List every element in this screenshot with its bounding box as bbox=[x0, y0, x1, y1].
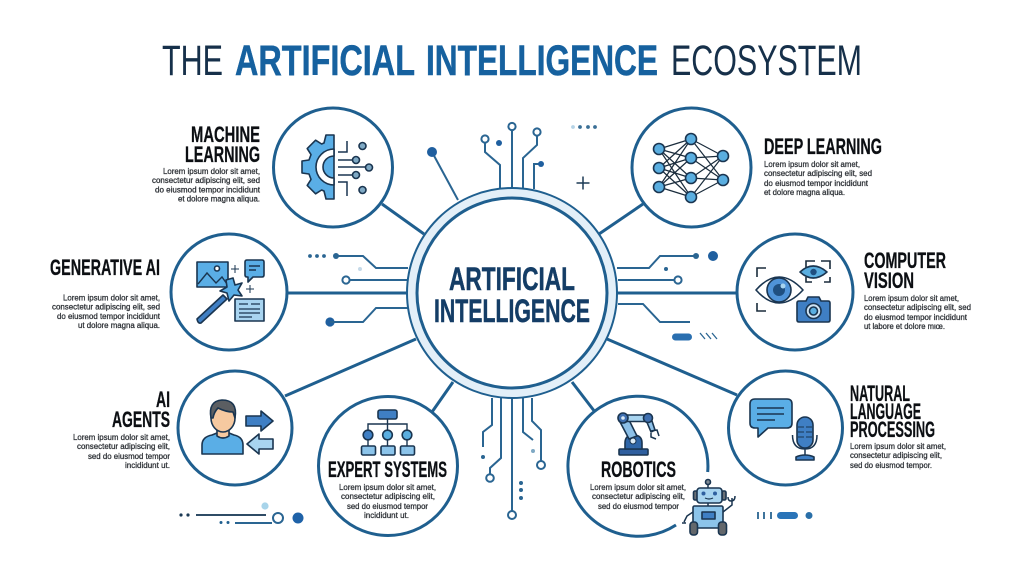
panel: machine learning bbox=[152, 108, 392, 227]
panel: deep learning bbox=[632, 108, 882, 227]
hub label bbox=[434, 261, 590, 329]
text block: do eiusmod tempor incididunt bbox=[57, 312, 161, 321]
text block bbox=[590, 483, 686, 511]
text block: et dolore magna aliqua. bbox=[764, 188, 845, 197]
heading bbox=[112, 387, 170, 432]
text block bbox=[850, 442, 946, 470]
heading: COMPUTER bbox=[864, 248, 946, 273]
text block: consectetur adipiscing elit, sed bbox=[52, 302, 160, 312]
title: ECOSYSTEM bbox=[671, 37, 862, 85]
text block: incididunt ut. bbox=[364, 511, 409, 520]
icon: eyes and camera bbox=[756, 261, 830, 322]
circuit traces top bbox=[427, 123, 597, 200]
panel: natural language processing bbox=[728, 371, 946, 485]
heading: LANGUAGE bbox=[850, 399, 921, 424]
heading: NATURAL bbox=[850, 381, 910, 406]
text block: Lorem ipsum dolor sit amet, bbox=[764, 160, 860, 169]
icon: small robot bbox=[682, 480, 735, 535]
panel: ai agents bbox=[73, 371, 292, 485]
text block: consectetur adipiscing elit, sed bbox=[152, 176, 260, 185]
text block: Lorem ipsum dolor sit amet, bbox=[850, 442, 946, 451]
heading: GENERATIVE AI bbox=[50, 255, 160, 280]
text block: sed do eiusmod tempor bbox=[88, 452, 170, 461]
text block: Lorem ipsum dolor sit amet, bbox=[590, 483, 686, 492]
icon: speech bubble and microphone bbox=[750, 399, 817, 460]
title: INTELLIGENCE bbox=[426, 37, 658, 85]
title bbox=[162, 37, 862, 85]
text block: et dolore magna aliqua. bbox=[178, 194, 260, 204]
heading: ROBOTICS bbox=[601, 457, 676, 482]
central hub: artificial intelligence bbox=[407, 188, 617, 398]
heading: VISION bbox=[864, 268, 914, 293]
text block: consectetur adipiscing elit, sed bbox=[864, 303, 971, 312]
text block: sed do eiusmod tempor bbox=[347, 502, 428, 511]
text block bbox=[764, 160, 872, 197]
text block: incididunt ut. bbox=[125, 461, 170, 470]
panel: generative ai bbox=[50, 234, 287, 350]
heading: AI bbox=[156, 387, 170, 412]
text block: consectetur adipiscing elit, bbox=[850, 451, 942, 460]
text block: consectetur adipiscing elit, bbox=[592, 492, 685, 501]
text block bbox=[864, 294, 971, 331]
icon: robot arm bbox=[618, 413, 659, 455]
text block: sed do eiusmod tempor. bbox=[850, 461, 932, 470]
heading: EXPERT SYSTEMS bbox=[328, 457, 447, 482]
hub label: INTELLIGENCE bbox=[434, 293, 590, 329]
heading: MACHINE bbox=[191, 122, 260, 147]
heading bbox=[864, 248, 946, 293]
title: THE bbox=[162, 37, 223, 85]
heading: DEEP LEARNING bbox=[764, 134, 882, 159]
text block: sed do eiusmod tempor bbox=[598, 502, 679, 511]
text block: Lorem ipsum dolor sit amet, bbox=[864, 294, 959, 303]
decoration bottom left bbox=[179, 502, 304, 524]
heading: LEARNING bbox=[185, 142, 260, 167]
text block bbox=[152, 167, 261, 204]
heading: PROCESSING bbox=[850, 417, 935, 442]
text block: do eiusmod tempor incididunt bbox=[864, 313, 968, 322]
text block: ut labore et dolore mιœ. bbox=[864, 322, 945, 331]
title: ARTIFICIAL bbox=[235, 37, 415, 85]
text block: ut dolore magna aliqua. bbox=[78, 321, 160, 330]
heading bbox=[850, 381, 935, 442]
text block: Lorem ipsum dolor sit amet, bbox=[163, 167, 260, 176]
text block: Lorem ipsum dolor sit amet, bbox=[339, 483, 436, 492]
panel: robotics bbox=[568, 396, 735, 536]
text block: consectetur adipiscing elit, bbox=[77, 442, 170, 451]
text block: Lorem ipsum dolor sit amet, bbox=[63, 294, 160, 302]
icon: hierarchy bbox=[362, 410, 414, 455]
circuit traces left bbox=[308, 253, 408, 327]
heading bbox=[185, 122, 260, 167]
text block bbox=[339, 483, 436, 520]
text block bbox=[73, 433, 170, 470]
text block: do eiusmod tempor incididunt bbox=[155, 186, 261, 194]
icon: magic wand with media bbox=[197, 260, 264, 323]
text block: consectetur adipiscing elit, sed bbox=[764, 169, 872, 178]
text block bbox=[52, 294, 161, 330]
icon: person with arrows bbox=[202, 400, 273, 454]
connector lines between hub and topics bbox=[285, 204, 737, 412]
circuit traces bottom bbox=[481, 398, 545, 519]
heading: AGENTS bbox=[112, 407, 170, 432]
text block: consectetur adipiscing elit, bbox=[341, 492, 435, 501]
text block: Lorem ipsum dolor sit amet, bbox=[73, 433, 170, 442]
panel: computer vision bbox=[737, 234, 971, 350]
panel: expert systems bbox=[318, 396, 458, 536]
icon: half gear with circuit bbox=[302, 135, 372, 199]
text block: do eiusmod tempor incididunt bbox=[764, 179, 869, 188]
icon: neural network bbox=[654, 134, 728, 202]
circuit traces right bbox=[617, 251, 718, 340]
decoration bottom right bbox=[758, 512, 812, 519]
hub label: ARTIFICIAL bbox=[449, 261, 575, 297]
